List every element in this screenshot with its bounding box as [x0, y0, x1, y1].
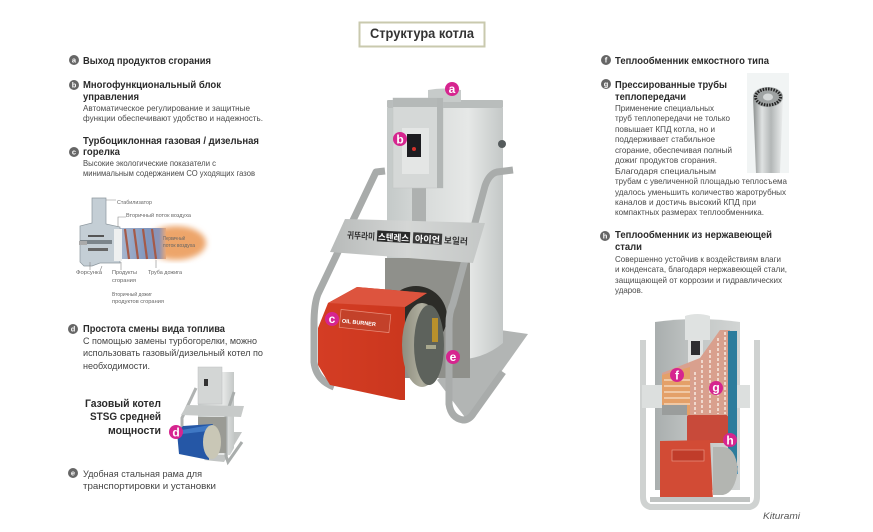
item b: control unit: управления: [83, 92, 139, 103]
item g: pressed tubes: поддерживает стабильное: [615, 134, 715, 144]
item e: steel frame: транспортировки и установки: [83, 481, 216, 492]
cutaway boiler illustration: [642, 314, 757, 507]
item c: burner: Турбоциклонная газовая / дизельная: [83, 135, 259, 147]
item c: burner: Высокие экологические показатели с: [83, 158, 217, 168]
item e: steel frame: e: [71, 468, 75, 478]
burner cross-section diagram: [76, 198, 206, 305]
item b: control unit: b: [72, 80, 77, 90]
item e: steel frame: [68, 468, 216, 492]
nameplate with Korean text: [330, 219, 485, 263]
burner cross-section diagram: Труба дожига: [148, 270, 183, 276]
item g: pressed tubes: теплопередачи: [615, 92, 686, 103]
item a: flue outlet: a: [72, 56, 77, 64]
callout e: e: [450, 350, 457, 364]
main boiler illustration: OIL BURNER: [341, 319, 376, 328]
burner cross-section diagram: поток воздуха: [163, 243, 196, 249]
item b: control unit: Многофункциональный блок: [83, 79, 222, 91]
burner cross-section diagram: Форсунка: [76, 270, 103, 276]
burner cross-section diagram: Продукты: [112, 270, 137, 276]
item h: stainless exchanger: h: [603, 232, 608, 240]
item g: pressed tubes: Благодаря специальным: [615, 166, 716, 176]
base plate: [437, 330, 528, 420]
item g: pressed tubes: труб теплопередачи не только: [615, 113, 730, 123]
burner cross-section diagram: Вторичный дожиг: [112, 291, 152, 298]
burner cross-section diagram: продуктов сгорания: [112, 299, 164, 305]
nameplate with Korean text: 스텐레스: [378, 231, 409, 244]
nameplate with Korean text: 아이언: [415, 233, 440, 245]
frame left arm: [314, 171, 385, 387]
item h: stainless exchanger: Теплообменник из нержавеющей: [615, 229, 772, 241]
item f: heat exchanger: Теплообменник емкостного типа: [615, 55, 769, 67]
burner cross-section diagram: Вторичный поток воздуха: [126, 212, 192, 219]
item h: stainless exchanger: [600, 229, 787, 295]
main boiler illustration: [314, 82, 528, 420]
callout f: f: [675, 368, 680, 382]
item g: pressed tubes: дожиг продуктов сгорания.: [615, 155, 717, 165]
title: [360, 22, 484, 46]
item b: control unit: Автоматическое регулирование и защитные: [83, 103, 250, 113]
callout a: [445, 82, 459, 96]
callout h: [723, 433, 737, 448]
callout a: a: [449, 82, 456, 96]
callout h: h: [726, 434, 734, 448]
item g: pressed tubes: g: [604, 80, 609, 88]
item h: stainless exchanger: защищающей от коррозии и гидравлических: [615, 275, 783, 285]
burner cross-section diagram: Первичный: [163, 235, 185, 242]
item g: pressed tubes: удалось уменьшить количество жаротрубных: [615, 187, 787, 197]
callout b: [393, 132, 407, 146]
callout b: b: [396, 132, 404, 146]
item d: fuel change: С помощью замены турбогорелки, можно: [83, 336, 257, 347]
gas boiler caption: STSG средней: [90, 411, 161, 423]
item g: pressed tubes: Применение специальных: [615, 103, 715, 113]
item e: steel frame: Удобная стальная рама для: [83, 469, 202, 480]
item d: fuel change: необходимости.: [83, 361, 150, 372]
callout e: [446, 350, 460, 364]
burner drum: [402, 303, 442, 387]
small gas boiler illustration: [169, 367, 244, 462]
gas boiler caption: Газовый котел: [85, 398, 161, 410]
item h: stainless exchanger: и конденсата, благодаря нержавеющей стали,: [615, 264, 787, 274]
item h: stainless exchanger: Совершенно устойчив к воздействиям влаги: [615, 254, 781, 264]
control box: [393, 98, 443, 188]
item d: fuel change: Простота смены вида топлива: [83, 324, 225, 335]
burner cross-section diagram: сгорания: [112, 278, 136, 284]
item b: control unit: функции обеспечивают удобство и надежность.: [83, 113, 263, 123]
item d: fuel change: использовать газовый/дизельный котел по: [83, 348, 263, 359]
nameplate with Korean text: 귀뚜라미: [347, 230, 375, 242]
callout g: [709, 380, 723, 395]
frame right arm: [449, 170, 513, 420]
burner cross-section diagram: Стабилизатор: [117, 200, 152, 206]
item c: burner: c: [72, 148, 76, 156]
lower chamber: [385, 258, 470, 378]
item g: pressed tubes: повышает КПД котла, но и: [615, 124, 715, 134]
callout g: g: [712, 380, 720, 394]
item f: heat exchanger: f: [605, 56, 608, 64]
callout f: [670, 368, 684, 382]
item d: fuel change: d: [71, 324, 76, 334]
item c: burner: [69, 135, 259, 178]
brand logo: Kiturami: [763, 511, 801, 521]
title: Структура котла: [370, 25, 474, 41]
item g: pressed tubes: сгорание, обеспечивая полный: [615, 145, 732, 155]
small gas boiler illustration: d: [172, 426, 180, 440]
gas boiler caption: [85, 398, 161, 437]
item d: fuel change: [68, 324, 263, 372]
item g: pressed tubes: трубам с увеличенной площадью теплосъема: [615, 176, 787, 186]
item g: pressed tubes: [601, 79, 787, 217]
item c: burner: горелка: [83, 147, 120, 158]
item h: stainless exchanger: стали: [615, 242, 642, 253]
item g: pressed tubes: Прессированные трубы: [615, 79, 727, 91]
red burner: [318, 287, 427, 400]
item a: flue outlet: Выход продуктов сгорания: [83, 56, 211, 67]
gas boiler caption: мощности: [108, 425, 161, 437]
tube photo: [747, 73, 789, 173]
item h: stainless exchanger: ударов.: [615, 285, 643, 295]
item b: control unit: [69, 79, 263, 123]
callout c: [325, 312, 339, 326]
nameplate with Korean text: 보일러: [444, 234, 468, 247]
item g: pressed tubes: каналов и достичь высокий КПД при: [615, 197, 756, 207]
item c: burner: минимальным содержанием СО уходящих газов: [83, 168, 255, 178]
item g: pressed tubes: компактных размерах теплообменника.: [615, 207, 764, 217]
callout c: c: [329, 312, 336, 326]
